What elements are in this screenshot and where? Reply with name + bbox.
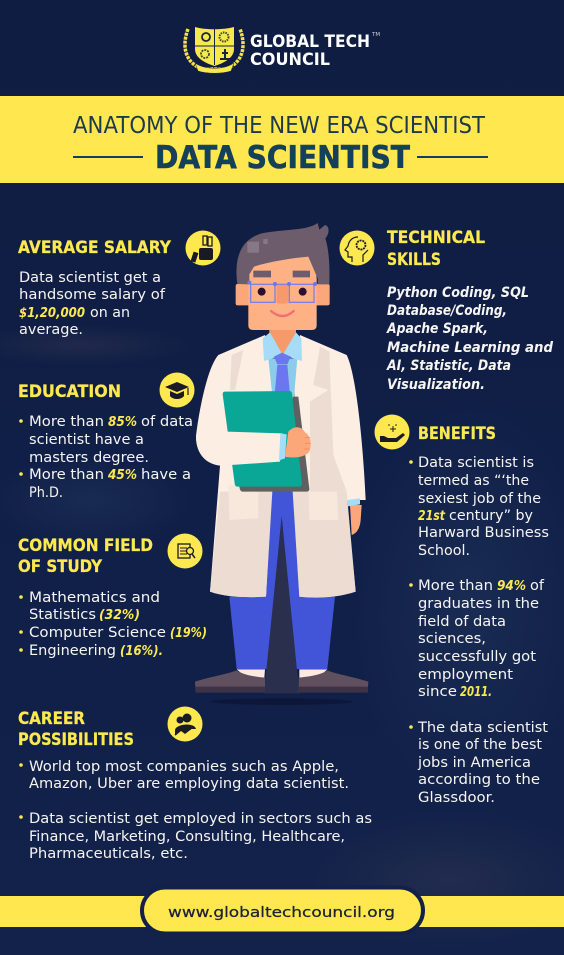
- footer band: [0, 888, 564, 934]
- education bullets: 45%: [107, 467, 137, 483]
- arm and hand: [196, 415, 311, 466]
- benefit: employment: since: [418, 684, 457, 700]
- heading: [18, 536, 153, 577]
- field bullets: Computer Science: [29, 625, 166, 641]
- hair highlights: [247, 239, 268, 253]
- heading: TECHNICAL: [387, 228, 485, 248]
- logo wordmark: GLOBAL TECH: [250, 32, 370, 51]
- benefit: glassdoor: The data scientist: [417, 720, 548, 736]
- career bullets: Finance, Marketing, Consulting, Healthcare,: [29, 829, 345, 845]
- education bullets: masters degree.: [29, 450, 149, 466]
- benefit: sexiest job: termed as “‘the: [418, 473, 529, 489]
- benefit: sexiest job: School.: [418, 543, 470, 559]
- floor shadow: [210, 698, 353, 705]
- heading: EDUCATION: [18, 382, 121, 402]
- logo wordmark: COUNCIL: [250, 50, 330, 69]
- panel: education: [18, 372, 194, 501]
- free hand: [350, 505, 362, 535]
- benefit: glassdoor: according to the: [418, 772, 540, 788]
- benefit: employment: [409, 578, 545, 700]
- skills text: [386, 285, 554, 393]
- education bullets: 85%: [108, 414, 137, 430]
- subtitle: DATA SCIENTIST: [155, 140, 410, 176]
- logo wordmark: [250, 32, 380, 69]
- education bullets: More than: [29, 467, 104, 483]
- trousers: [229, 490, 335, 693]
- icon: document search: [168, 534, 202, 568]
- scientist illustration: [195, 223, 368, 705]
- heading: SKILLS: [387, 250, 441, 270]
- lab coat: [196, 335, 366, 598]
- benefit: employment: of: [530, 578, 545, 594]
- title: ANATOMY OF THE NEW ERA SCIENTIST: [73, 113, 486, 139]
- career bullets: Data scientist get employed in sectors such as: [29, 811, 372, 827]
- benefit: employment: More than: [418, 578, 493, 594]
- mouth: [271, 311, 294, 316]
- salary text: average.: [19, 322, 83, 338]
- url pill: [142, 888, 423, 934]
- eyebrows: [253, 271, 310, 277]
- free cuff: [347, 498, 360, 506]
- education bullets: have a: [141, 467, 191, 483]
- career bullets: Pharmaceuticals, etc.: [29, 846, 188, 862]
- heading: COMMON FIELD: [18, 536, 153, 556]
- career bullets: Amazon, Uber are employing data scientist.: [29, 776, 349, 792]
- panel: benefits: [374, 414, 549, 806]
- benefit: employment: graduates in the: [418, 596, 539, 612]
- benefit: employment: successfully got: [418, 649, 536, 665]
- skills text: Database/Coding,: [387, 303, 507, 319]
- salary text: $1,20,000: [19, 305, 85, 321]
- icon: money and wallet: [186, 230, 220, 266]
- benefit: sexiest job: Data scientist is: [418, 455, 534, 471]
- education bullets: scientist have a: [29, 432, 144, 448]
- heading: BENEFITS: [418, 424, 496, 444]
- icon: people and growth arrow: [168, 706, 202, 742]
- heading: CAREER: [18, 709, 85, 729]
- icon: graduation cap: [160, 372, 194, 408]
- field bullets: Engineering: [29, 643, 116, 659]
- heading: POSSIBILITIES: [18, 730, 134, 750]
- url: www.globaltechcouncil.org: [168, 905, 395, 921]
- benefit: sexiest job: sexiest job of the: [418, 491, 541, 507]
- field bullets: [19, 590, 207, 659]
- benefit: glassdoor: [409, 720, 548, 806]
- skills text: Apache Spark,: [386, 321, 488, 337]
- benefit: sexiest job: [409, 455, 549, 559]
- ears: [236, 284, 330, 305]
- skills text: Python Coding, SQL: [387, 285, 529, 301]
- panel: average salary: [18, 230, 220, 338]
- benefit: employment: field of data: [418, 614, 506, 630]
- benefit: sexiest job: century” by: [449, 508, 533, 524]
- salary text: Data scientist get a: [19, 270, 161, 286]
- heading: OF STUDY: [18, 557, 103, 577]
- benefit: employment: 94%: [497, 578, 526, 594]
- benefit: employment: 2011.: [460, 684, 492, 700]
- salary text: [19, 270, 166, 338]
- field bullets: (32%): [99, 607, 140, 623]
- nose: [277, 284, 288, 304]
- career bullets: [19, 759, 372, 862]
- salary text: handsome salary of: [19, 287, 166, 303]
- field bullets: (16%).: [120, 643, 163, 659]
- face: [248, 248, 317, 330]
- benefit: employment: employment: [418, 667, 513, 683]
- field bullets: Statistics: [29, 607, 96, 623]
- shoes: [195, 669, 368, 692]
- education bullets: More than: [29, 414, 104, 430]
- panel: career possibilities: [18, 706, 372, 862]
- career bullets: World top most companies such as Apple,: [29, 759, 339, 775]
- benefit: glassdoor: jobs in America: [417, 755, 531, 771]
- skills text: Visualization.: [387, 377, 485, 393]
- benefit: sexiest job: 21st: [418, 508, 445, 524]
- logo: [185, 27, 380, 73]
- eyes: [258, 288, 307, 296]
- title banner: [0, 96, 564, 183]
- skills text: AI, Statistic, Data: [386, 358, 511, 374]
- benefit: glassdoor: Glassdoor.: [418, 790, 495, 806]
- benefit: employment: sciences,: [418, 631, 486, 647]
- heading: AVERAGE SALARY: [18, 238, 172, 258]
- glasses: [247, 281, 317, 302]
- logo crest: [185, 27, 243, 73]
- education bullets: [19, 414, 193, 501]
- education bullets: Ph.D.: [29, 485, 63, 501]
- benefit: glassdoor: is one of the best: [418, 737, 542, 753]
- icon: hand with sparkles: [374, 414, 410, 450]
- icon: head with gear: [340, 230, 374, 266]
- panel: technical skills: [340, 228, 554, 393]
- hair: [236, 223, 329, 284]
- clipboard: [223, 391, 309, 492]
- education bullets: of data: [141, 414, 193, 430]
- field bullets: (19%): [170, 625, 207, 641]
- neck: [269, 328, 296, 355]
- logo wordmark: TM: [371, 32, 380, 38]
- salary text: on an: [90, 305, 130, 321]
- benefit: sexiest job: Harward Business: [418, 525, 549, 541]
- field bullets: Mathematics and: [29, 590, 160, 606]
- heading: [18, 709, 134, 750]
- panel: common field of study: [18, 534, 207, 659]
- heading: [387, 228, 485, 270]
- skills text: Machine Learning and: [387, 340, 554, 356]
- collar and tie: [263, 332, 302, 405]
